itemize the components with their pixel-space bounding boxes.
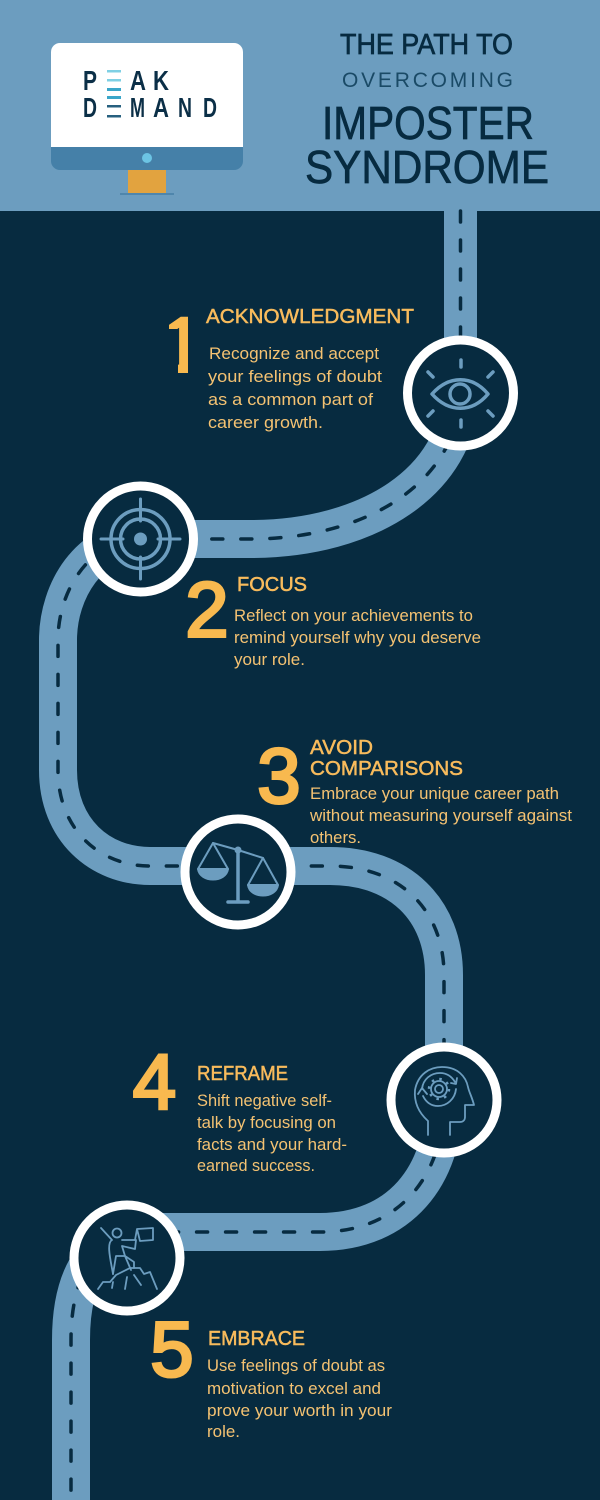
body text: your role. (234, 650, 305, 669)
logo monitor: N (178, 92, 192, 123)
body text (309, 784, 572, 847)
step 5: embrace (74, 1205, 392, 1441)
heading: REFRAME (197, 1063, 288, 1085)
body text: earned success. (197, 1156, 315, 1175)
step 3: avoid comparisons (185, 732, 572, 925)
icon: eye (408, 340, 514, 446)
body text: Reflect on your achievements to (234, 606, 473, 625)
icon: scales (185, 819, 291, 925)
numeral 3: 3 (257, 732, 301, 820)
heading: AVOID (310, 737, 373, 759)
body text: others. (310, 828, 361, 847)
logo monitor: D (203, 92, 217, 123)
body text (208, 344, 382, 432)
logo monitor: K (153, 65, 169, 96)
body text (207, 1356, 392, 1441)
title (305, 29, 549, 193)
body text: without measuring yourself against (309, 806, 572, 825)
winding road (58, 211, 460, 1500)
body text: as a common part of (208, 390, 373, 409)
logo monitor: A (130, 65, 146, 96)
body text: motivation to excel and (207, 1379, 381, 1398)
body text: your feelings of doubt (208, 367, 382, 386)
body text: career growth. (208, 413, 323, 432)
heading (310, 737, 463, 780)
logo monitor: A (153, 92, 169, 123)
title: SYNDROME (305, 141, 549, 193)
numeral 1: 1 (161, 301, 204, 389)
heading: ACKNOWLEDGMENT (206, 306, 414, 328)
body text: prove your worth in your (207, 1401, 392, 1420)
heading: FOCUS (237, 574, 307, 596)
body text: Embrace your unique career path (310, 784, 559, 803)
logo monitor: P (83, 65, 97, 96)
header panel (0, 0, 600, 211)
logo monitor (51, 43, 243, 195)
title: IMPOSTER (322, 97, 534, 149)
step 1: acknowledgment (161, 301, 514, 446)
heading: COMPARISONS (310, 758, 463, 780)
body text: talk by focusing on (197, 1113, 336, 1132)
step 2: focus (88, 486, 481, 669)
icon: target (88, 486, 194, 592)
logo monitor: D (83, 92, 97, 123)
numeral 5: 5 (150, 1305, 194, 1393)
icon: climber with flag (74, 1205, 180, 1311)
body text: Use feelings of doubt as (207, 1356, 385, 1375)
title: OVERCOMING (342, 69, 513, 92)
body text: role. (207, 1422, 240, 1441)
body text: facts and your hard- (197, 1135, 347, 1154)
body text (197, 1091, 347, 1175)
body text (234, 606, 481, 669)
body text: Shift negative self- (197, 1091, 332, 1110)
logo monitor: M (130, 92, 145, 123)
numeral 2: 2 (185, 566, 229, 654)
title: THE PATH TO (340, 29, 513, 61)
body text: remind yourself why you deserve (234, 628, 481, 647)
icon: head with gear (391, 1047, 497, 1153)
numeral 4: 4 (133, 1038, 176, 1126)
body text: Recognize and accept (209, 344, 379, 363)
step 4: reframe (133, 1038, 497, 1175)
heading: EMBRACE (208, 1328, 305, 1350)
